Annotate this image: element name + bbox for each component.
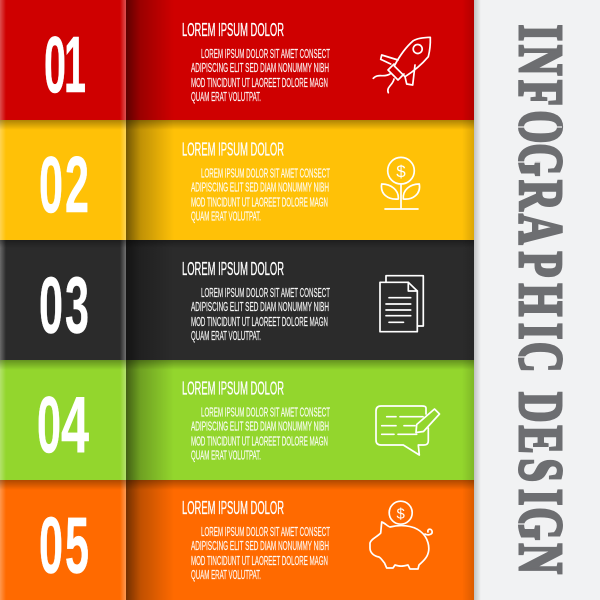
text block 05: ADIPISCING ELIT SED DIAM NONUMMY NIBH: [191, 539, 329, 553]
panel: title sidebar: [474, 0, 600, 600]
heading: infographic design: INFOGRAPHIC DESIGN: [506, 25, 574, 574]
text block 04: QUAM ERAT VOLUTPAT.: [191, 448, 261, 462]
icon: money plant: $: [396, 162, 406, 181]
text block 03: MOD TINCIDUNT UT LAOREET DOLORE MAGN: [191, 315, 328, 329]
text block 05: QUAM ERAT VOLUTPAT.: [191, 568, 261, 582]
panel: step 04: LOREM IPSUM DOLOR SIT AMET CONSECT: [201, 406, 330, 420]
heading 01: LOREM IPSUM DOLOR: [182, 20, 284, 40]
panel: step 05: LOREM IPSUM DOLOR SIT AMET CONSECT: [201, 525, 330, 539]
text block 03: ADIPISCING ELIT SED DIAM NONUMMY NIBH: [191, 300, 329, 314]
text block 04: MOD TINCIDUNT UT LAOREET DOLORE MAGN: [191, 434, 328, 448]
icon: piggy bank with coin: $: [397, 506, 406, 522]
panel: step 03: LOREM IPSUM DOLOR SIT AMET CONSECT: [201, 286, 330, 300]
icon: piggy bank with coin: [370, 501, 432, 569]
text block 01: ADIPISCING ELIT SED DIAM NONUMMY NIBH: [191, 61, 329, 75]
panel: step 01: 1: [64, 20, 86, 109]
number 01: 0: [44, 20, 66, 109]
icon: rocket: [373, 37, 430, 93]
text block 02: [191, 166, 330, 224]
text block 01: MOD TINCIDUNT UT LAOREET DOLORE MAGN: [191, 76, 328, 90]
text block 04: ADIPISCING ELIT SED DIAM NONUMMY NIBH: [191, 420, 329, 434]
number 05: 0: [39, 500, 63, 590]
panel: step 02: LOREM IPSUM DOLOR SIT AMET CONSECT: [201, 166, 330, 180]
icon: documents: [380, 276, 423, 332]
text block 02: QUAM ERAT VOLUTPAT.: [191, 210, 261, 224]
number 02: 2: [65, 140, 89, 229]
number 04: 0: [37, 380, 61, 469]
text block 04: [191, 406, 330, 462]
text block 03: [191, 286, 330, 343]
panel: step 05: [0, 480, 474, 600]
panel: step 04: [0, 360, 474, 480]
text block 01: QUAM ERAT VOLUTPAT.: [191, 90, 261, 104]
text block 02: MOD TINCIDUNT UT LAOREET DOLORE MAGN: [191, 196, 328, 210]
text block 02: ADIPISCING ELIT SED DIAM NONUMMY NIBH: [191, 180, 329, 194]
number 03: 0: [39, 260, 63, 350]
number 02: 0: [39, 140, 63, 229]
number 03: 3: [65, 260, 89, 350]
number 05: 5: [65, 500, 89, 590]
number 04: 4: [61, 380, 89, 469]
heading 03: LOREM IPSUM DOLOR: [182, 259, 284, 279]
heading 02: LOREM IPSUM DOLOR: [182, 140, 284, 160]
panel: step 01: [0, 0, 474, 120]
text block 05: MOD TINCIDUNT UT LAOREET DOLORE MAGN: [191, 554, 328, 568]
panel: step 03: [0, 240, 474, 360]
icon: speech bubble with pencil: [376, 406, 440, 455]
text block 05: [191, 525, 330, 582]
heading 05: LOREM IPSUM DOLOR: [182, 498, 284, 518]
text block 01: [191, 47, 330, 104]
icon: money plant: [381, 157, 420, 209]
panel: step 02: [0, 120, 474, 240]
text block 03: QUAM ERAT VOLUTPAT.: [191, 329, 261, 343]
panel: step 01: LOREM IPSUM DOLOR SIT AMET CONSECT: [201, 47, 330, 61]
heading 04: LOREM IPSUM DOLOR: [182, 378, 284, 398]
